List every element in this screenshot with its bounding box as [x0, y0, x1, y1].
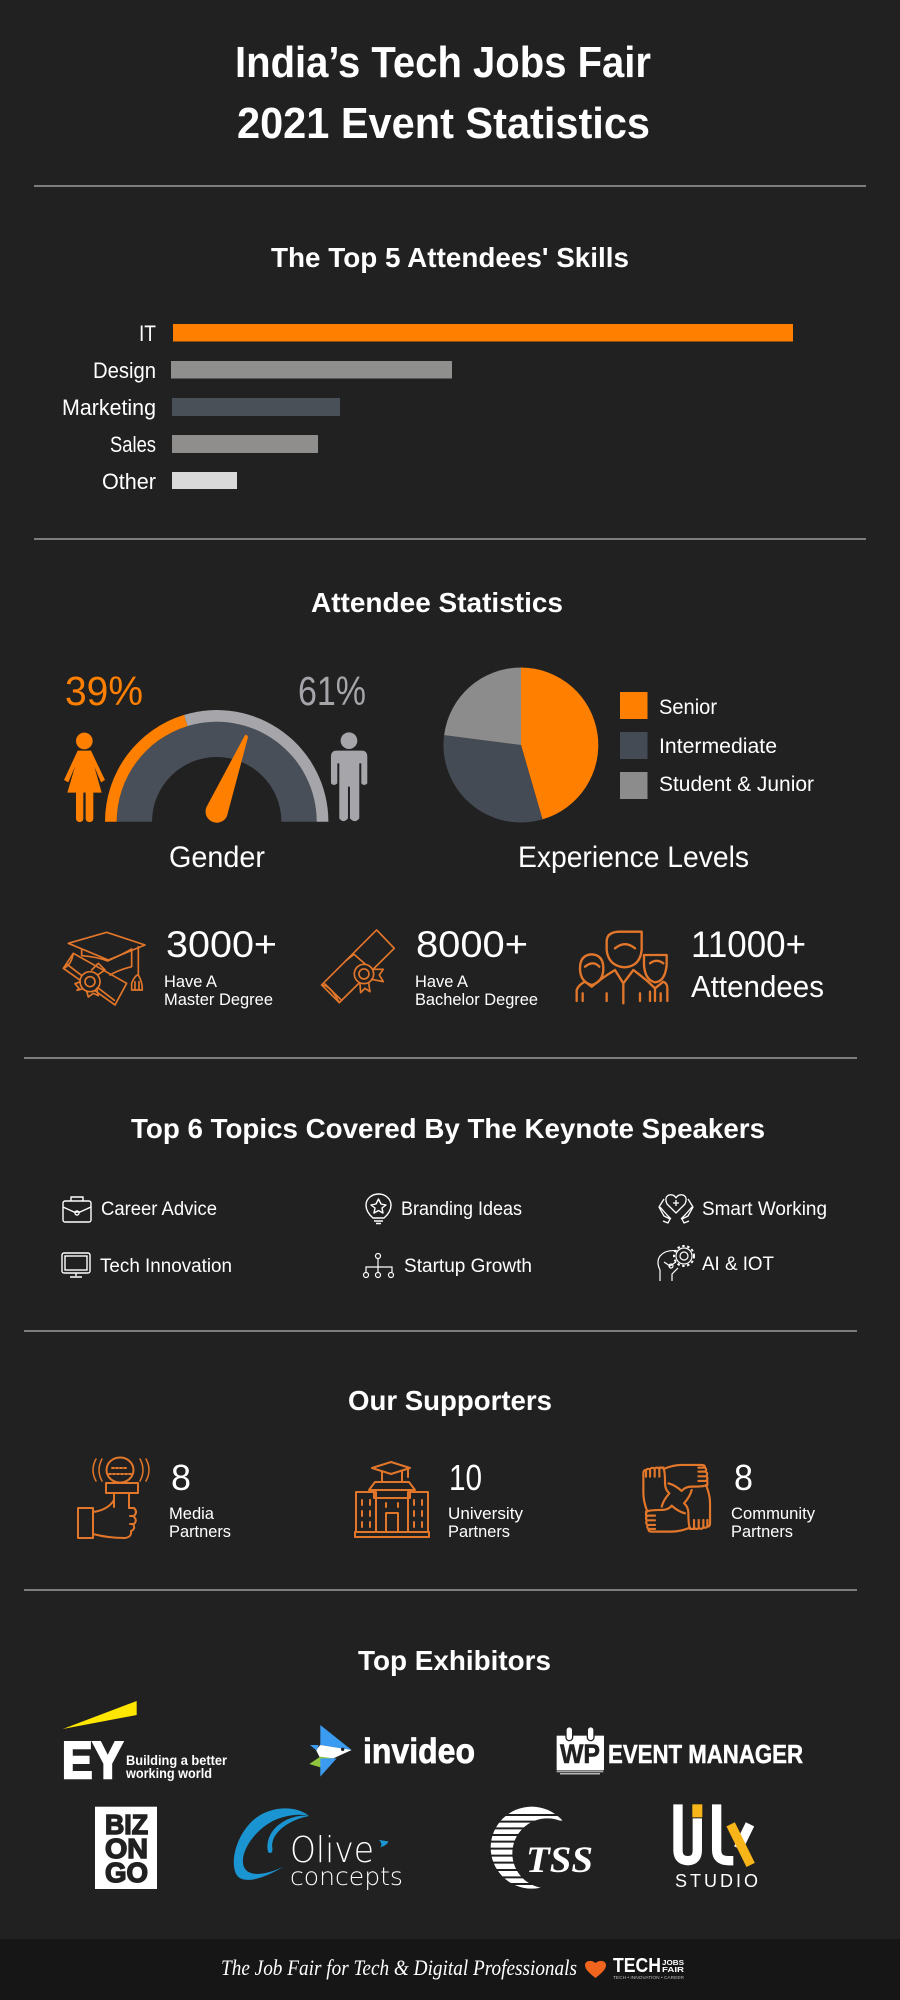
topic: startup growth: Startup Growth — [404, 1256, 532, 1277]
stat: community partners: Community — [731, 1504, 815, 1523]
pie chart: experience levels — [443, 667, 814, 874]
logo: UX Studio: STUDIO — [675, 1871, 758, 1891]
icon: group of people — [577, 932, 667, 1003]
topic: ai and iot — [658, 1246, 774, 1281]
panel: our supporters — [78, 1385, 815, 1541]
stat: community partners: Partners — [731, 1522, 793, 1541]
topic: smart working: Smart Working — [702, 1199, 827, 1220]
topic: branding ideas — [366, 1194, 522, 1224]
icon: hands holding heart — [659, 1195, 693, 1223]
gender gauge chart — [64, 668, 367, 874]
icon: fish — [309, 1725, 352, 1777]
stat: master degree: Have A — [164, 972, 218, 991]
logo: WP Event Manager: EVENT MANAGER — [608, 1739, 803, 1769]
bar chart: skills: Design — [93, 358, 156, 383]
title: India’s Tech Jobs Fair — [235, 38, 651, 87]
gender gauge chart: Gender — [169, 841, 265, 874]
logo: WP Event Manager: WP — [560, 1739, 600, 1769]
logo: EY: working world — [125, 1766, 212, 1781]
stat: university partners — [355, 1457, 524, 1541]
topic: career advice — [63, 1197, 217, 1222]
topic: tech innovation — [62, 1253, 232, 1277]
heading: our supporters: Our Supporters — [348, 1385, 552, 1416]
icon: diploma scroll — [322, 930, 394, 1003]
logo: Biz On Go: GO — [105, 1857, 148, 1888]
logo: tech jobs fair: FAIR — [662, 1965, 685, 1974]
title — [235, 38, 651, 148]
logo: EY: EY — [62, 1732, 123, 1790]
legend — [620, 692, 814, 799]
footer tagline: The Job Fair for Tech & Digital Professionals — [221, 1955, 577, 1980]
logo: tech jobs fair: JOBS — [662, 1958, 684, 1967]
pie chart: experience levels: Experience Levels — [518, 841, 749, 874]
stat: master degree: 3000+ — [166, 924, 277, 965]
panel: top exhibitors — [62, 1645, 803, 1891]
panel: attendee statistics — [63, 587, 824, 1009]
icon: org chart — [364, 1254, 394, 1278]
bar chart: skills: Sales — [110, 432, 156, 457]
stat: attendees: Attendees — [691, 969, 824, 1004]
icon: graduation cap and diploma — [63, 932, 145, 1005]
topic: tech innovation: Tech Innovation — [100, 1256, 232, 1277]
icon: hand holding microphone — [78, 1458, 149, 1538]
topic: ai and iot: AI & IOT — [702, 1254, 774, 1275]
logo: EY — [62, 1701, 228, 1790]
gender gauge chart: 61% — [298, 668, 366, 714]
bar chart: skills: IT — [139, 321, 156, 346]
logo: invideo: invideo — [363, 1732, 475, 1771]
stat: university partners: 10 — [449, 1457, 482, 1498]
heading: keynote topics: Top 6 Topics Covered By The Keynote Speakers — [131, 1113, 765, 1144]
logo: Biz On Go: ON — [105, 1833, 148, 1864]
stat: master degree: Master Degree — [164, 990, 273, 1009]
logo: Olive Concepts: concepts — [290, 1862, 403, 1891]
icon: striped crescent — [487, 1807, 587, 1889]
stat: community partners — [643, 1457, 815, 1541]
topic: smart working — [659, 1195, 827, 1223]
stat: media partners: Partners — [169, 1522, 231, 1541]
topic: startup growth — [364, 1254, 532, 1278]
stat: bachelor degree: Bachelor Degree — [415, 990, 538, 1009]
topic: career advice: Career Advice — [101, 1199, 217, 1220]
stat: attendees — [577, 924, 824, 1004]
logo: tech jobs fair — [613, 1955, 685, 1980]
footer band — [0, 1939, 900, 2000]
legend: Senior — [659, 696, 717, 719]
stat: university partners: University — [448, 1504, 524, 1523]
stat: bachelor degree — [322, 924, 538, 1009]
topic: branding ideas: Branding Ideas — [401, 1199, 522, 1220]
icon: monitor — [62, 1253, 90, 1277]
icon: university building — [355, 1462, 429, 1537]
stat: community partners: 8 — [734, 1457, 753, 1498]
bar chart: skills: Marketing — [62, 395, 156, 420]
logo: tech jobs fair: TECH — [613, 1955, 661, 1977]
logo: Olive Concepts: Olive — [290, 1830, 374, 1871]
icon: blue swirl — [234, 1808, 388, 1880]
stat: media partners: Media — [169, 1504, 215, 1523]
logo: TSS — [487, 1807, 593, 1889]
logo: WP Event Manager — [557, 1727, 803, 1774]
icon: woman — [64, 733, 105, 822]
icon: four interlocking hands — [643, 1465, 710, 1532]
panel: top 5 skills — [62, 242, 793, 494]
icon: light bulb with star — [366, 1194, 391, 1224]
heading: top exhibitors: Top Exhibitors — [358, 1645, 551, 1676]
bar chart: skills — [62, 321, 793, 494]
logo: invideo — [309, 1725, 475, 1777]
logo: Biz On Go — [95, 1807, 157, 1889]
icon: head with gear — [658, 1246, 694, 1281]
logo: TSS: TSS — [526, 1840, 593, 1881]
icon: briefcase — [63, 1197, 91, 1222]
legend: Student & Junior — [659, 773, 814, 796]
stat: media partners — [78, 1457, 231, 1541]
stat: bachelor degree: 8000+ — [416, 924, 528, 965]
icon: calendar — [557, 1727, 604, 1774]
logo: UX Studio — [675, 1804, 758, 1891]
logo: EY: Building a better — [126, 1753, 228, 1768]
logo: Biz On Go: BIZ — [105, 1809, 148, 1840]
heading: attendee statistics: Attendee Statistics — [311, 587, 563, 618]
stat: bachelor degree: Have A — [415, 972, 469, 991]
icon: ux mark — [678, 1804, 751, 1865]
panel: keynote topics — [62, 1113, 827, 1281]
icon: man — [331, 732, 367, 821]
logo: Olive Concepts — [234, 1808, 403, 1891]
stat: media partners: 8 — [171, 1457, 191, 1498]
title: 2021 Event Statistics — [237, 99, 650, 148]
logo: tech jobs fair: TECH • INNOVATION • CAREER — [613, 1975, 685, 1980]
legend: Intermediate — [659, 735, 777, 758]
stat: university partners: Partners — [448, 1522, 510, 1541]
bar chart: skills: Other — [102, 469, 156, 494]
stat: attendees: 11000+ — [691, 924, 806, 965]
stat: master degree — [63, 924, 277, 1009]
gender gauge chart: 39% — [65, 668, 143, 714]
icon: heart — [585, 1961, 606, 1978]
heading: skills: The Top 5 Attendees' Skills — [271, 242, 629, 273]
